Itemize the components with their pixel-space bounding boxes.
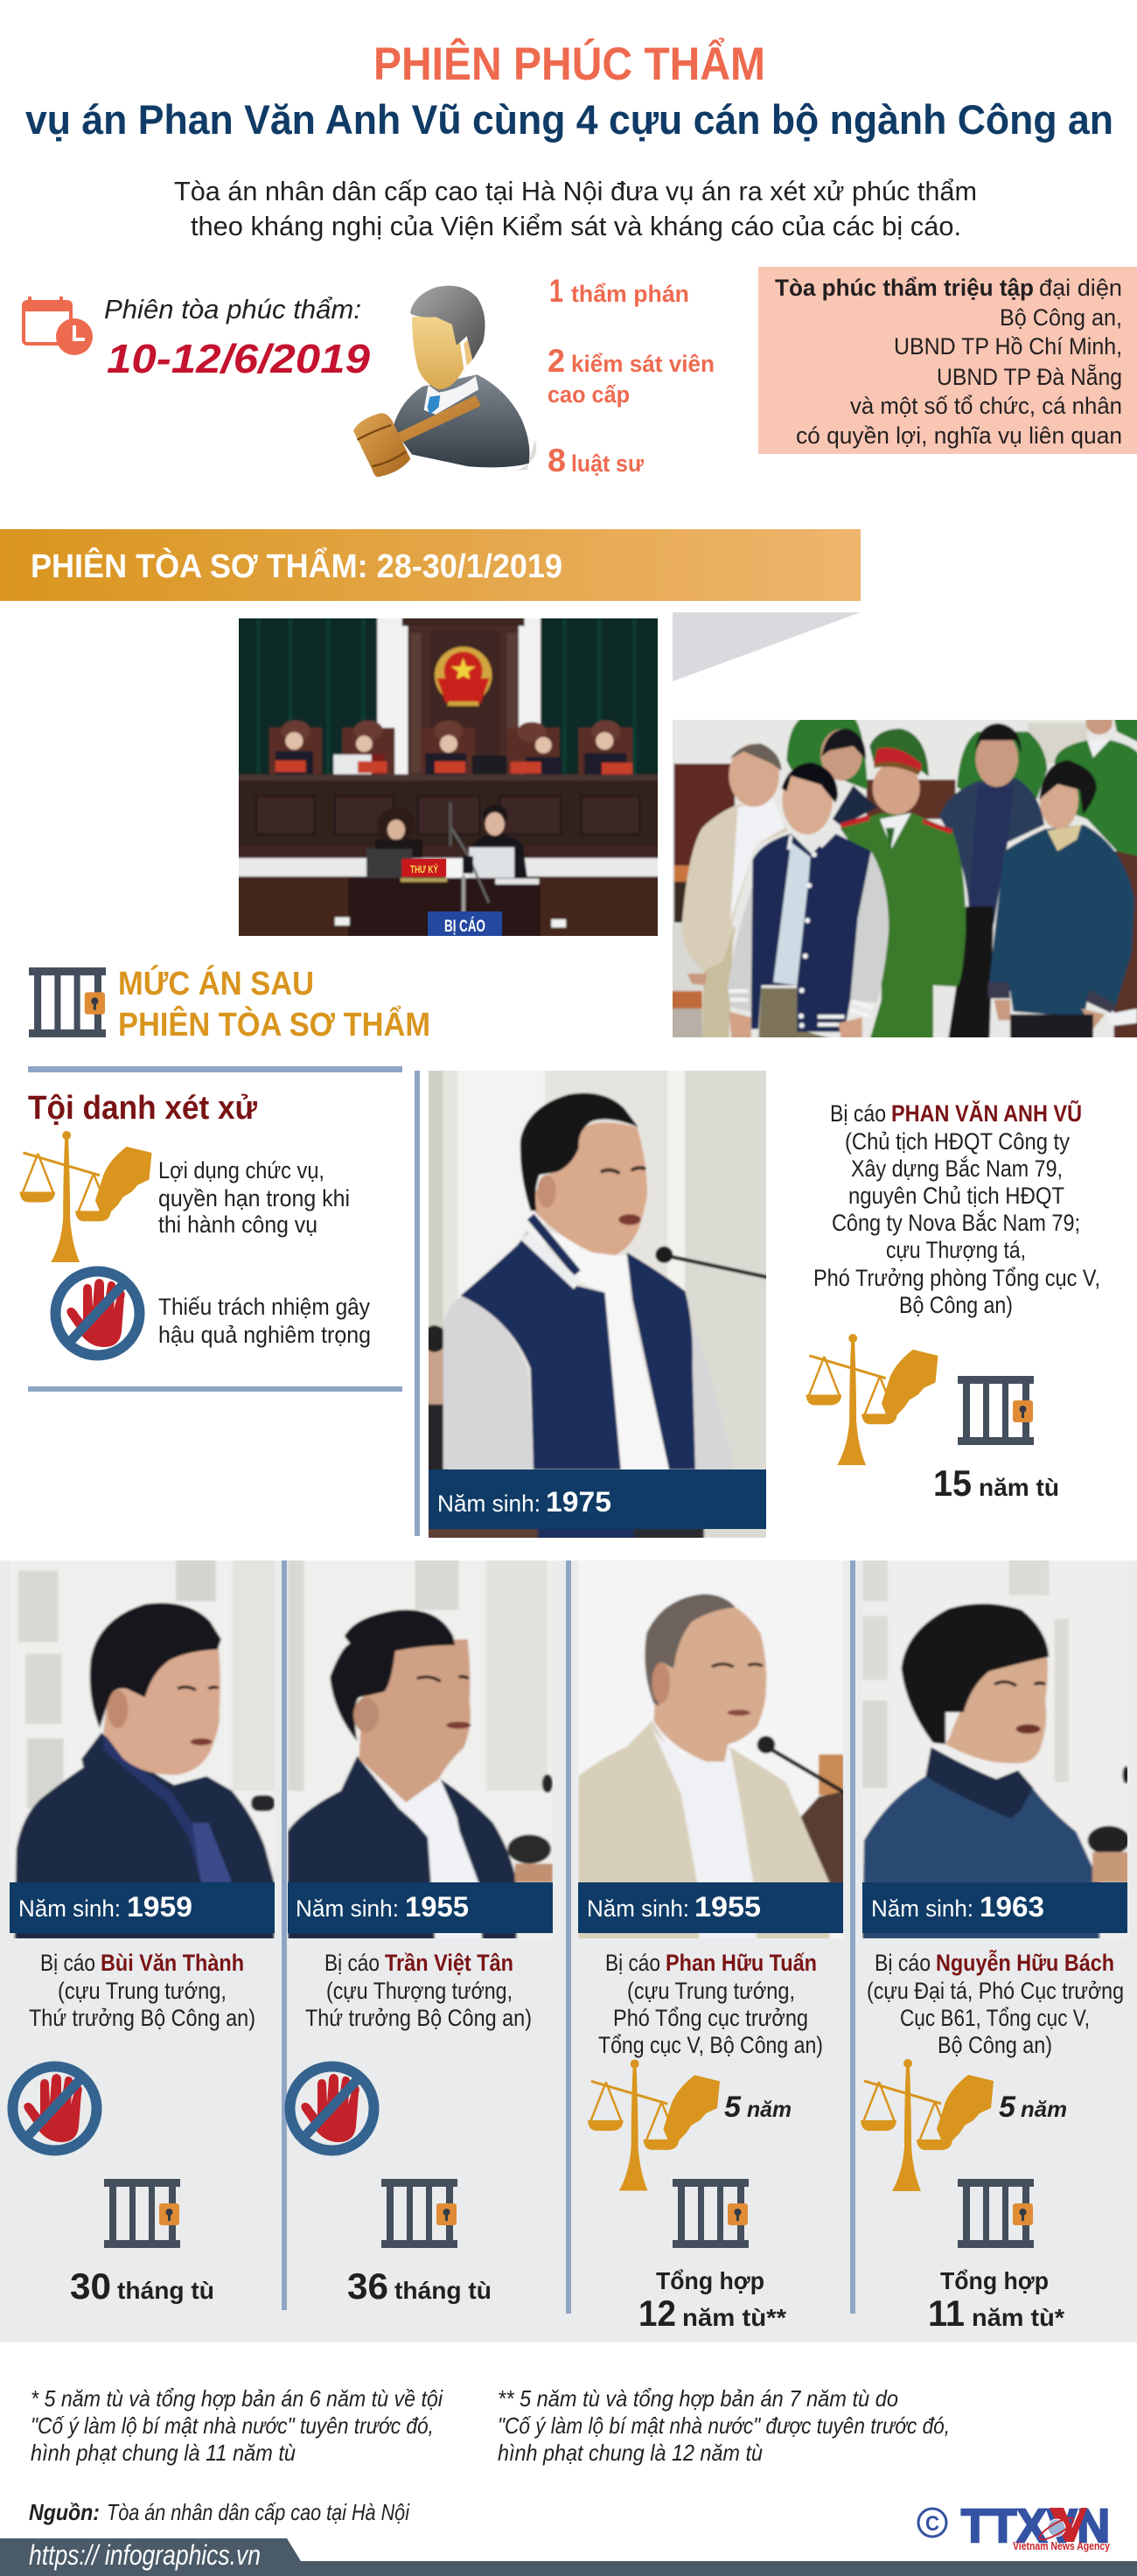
decorative gray triangle pointer xyxy=(673,612,861,681)
bio: Phan Hữu Tuấn: Bị cáo xyxy=(605,1950,660,1976)
stat: prosecutors: cao cấp xyxy=(548,381,630,408)
icon: jail bars xyxy=(381,2179,457,2248)
bio: Nguyễn Hữu Bách: Cục B61, Tổng cục V, xyxy=(900,2005,1090,2031)
photo: Phan Văn Anh Vũ: Năm sinh: xyxy=(437,1490,541,1517)
sentence: 12 years total: năm tù** xyxy=(682,2304,786,2331)
icon: scale and hand xyxy=(588,2059,720,2191)
label: 5 years: 5 xyxy=(999,2091,1016,2124)
intro text xyxy=(174,176,977,241)
panel: summoned parties: có quyền lợi, nghĩa vụ liên quan xyxy=(796,422,1122,449)
source xyxy=(29,2499,410,2525)
sentence: 12 years total: 12 xyxy=(638,2293,676,2334)
heading: sentences after first trial: PHIÊN TÒA SƠ THẨM xyxy=(118,1004,430,1044)
photo: Nguyễn Hữu Bách: Năm sinh: xyxy=(871,1895,973,1922)
hearing date label: Phiên tòa phúc thẩm: xyxy=(104,294,361,325)
icon: stop hand xyxy=(56,1272,140,1356)
bio: Nguyễn Hữu Bách xyxy=(867,1949,1124,2058)
icon: judge with gavel xyxy=(353,286,536,477)
stat: lawyers: luật sư xyxy=(571,450,644,477)
stat: judges: 1 xyxy=(549,273,563,309)
bio: Phan Văn Anh Vũ: Bộ Công an) xyxy=(899,1292,1013,1318)
sentence: 15 years xyxy=(933,1463,1059,1504)
stat: prosecutors xyxy=(548,343,715,408)
footnote: two asterisks xyxy=(498,2385,950,2466)
bio: Phan Hữu Tuấn: Tổng cục V, Bộ Công an) xyxy=(598,2032,823,2058)
stat: prosecutors: kiểm sát viên xyxy=(571,351,715,377)
label: 5 years xyxy=(999,2091,1067,2124)
stat: lawyers: 8 xyxy=(548,443,566,478)
icon: jail bars xyxy=(29,967,106,1037)
sentence: 11 years total xyxy=(928,2267,1064,2334)
bio: Phan Văn Anh Vũ: (Chủ tịch HĐQT Công ty xyxy=(845,1128,1070,1155)
photo: Bùi Văn Thành: 1959 xyxy=(127,1891,192,1923)
bio: Phan Văn Anh Vũ xyxy=(813,1100,1100,1318)
bio: Trần Việt Tân: Bị cáo xyxy=(324,1950,380,1976)
icon: jail bars xyxy=(673,2179,749,2248)
sentence: 30 months: 30 xyxy=(70,2265,111,2307)
photo: Nguyễn Hữu Bách: 1963 xyxy=(980,1891,1044,1923)
stat: prosecutors: 2 xyxy=(548,343,565,379)
photo: courtroom: BỊ CÁO xyxy=(444,917,485,936)
sentence: 11 years total: 11 xyxy=(928,2293,965,2334)
stat: lawyers xyxy=(548,443,644,478)
photo: defendants standing in court xyxy=(670,711,1137,1041)
icon: scale and hand xyxy=(861,2059,994,2191)
sentence: 11 years total: Tổng hợp xyxy=(940,2267,1049,2294)
bio: Bùi Văn Thành: Bùi Văn Thành xyxy=(101,1950,244,1976)
sentence: 30 months: tháng tù xyxy=(117,2277,214,2304)
charge: abuse of power xyxy=(158,1157,350,1238)
stat: judges: thẩm phán xyxy=(571,281,689,307)
bio: Nguyễn Hữu Bách: Bị cáo xyxy=(875,1950,931,1976)
photo: Phan Hữu Tuấn: 1955 xyxy=(694,1891,761,1923)
photo: courtroom: THƯ KÝ xyxy=(410,862,438,876)
icon: scale and hand xyxy=(20,1131,151,1262)
photo: Phan Văn Anh Vũ: 1975 xyxy=(546,1486,611,1518)
panel: summoned parties: đại diện xyxy=(1039,275,1122,301)
icon: scale and hand xyxy=(806,1334,938,1465)
sentence: 36 months: 36 xyxy=(347,2265,388,2307)
panel: summoned parties: UBND TP Đà Nẵng xyxy=(937,363,1122,390)
stat: judges xyxy=(549,273,689,309)
banner: first-instance trial xyxy=(0,529,861,601)
footnote: one asterisk: * 5 năm tù và tổng hợp bản án 6 năm tù về tội xyxy=(31,2385,443,2412)
heading: sentences after first trial: MỨC ÁN SAU xyxy=(118,964,314,1002)
label: 5 years xyxy=(724,2091,792,2124)
charge: abuse of power: quyền hạn trong khi xyxy=(158,1185,350,1211)
logo: TTXVN: Vietnam News Agency xyxy=(1013,2539,1111,2552)
bio: Bùi Văn Thành xyxy=(29,1950,255,2031)
bio: Trần Việt Tân: Trần Việt Tân xyxy=(385,1950,513,1976)
photo: Phan Hữu Tuấn xyxy=(575,1558,846,1943)
logo: TTXVN: TTXVN xyxy=(961,2500,1110,2552)
bio: Trần Việt Tân xyxy=(305,1950,532,2031)
panel: summoned parties: Tòa phúc thẩm triệu tập xyxy=(775,275,1034,301)
bio: Phan Văn Anh Vũ: nguyên Chủ tịch HĐQT xyxy=(848,1183,1064,1209)
bio: Bùi Văn Thành: Bị cáo xyxy=(40,1950,95,1976)
icon: jail bars xyxy=(958,1376,1034,1445)
photo: Nguyễn Hữu Bách xyxy=(859,1558,1131,1943)
charge: negligence: Thiếu trách nhiệm gây xyxy=(158,1294,370,1320)
bio: Phan Hữu Tuấn: Phan Hữu Tuấn xyxy=(666,1950,817,1976)
bio: Trần Việt Tân: (cựu Thượng tướng, xyxy=(326,1978,513,2004)
hearing date: 10-12/6/2019 xyxy=(107,336,370,381)
bio: Phan Văn Anh Vũ: Phó Trưởng phòng Tổng cục V, xyxy=(813,1265,1100,1291)
sentence: 15 years: năm tù xyxy=(979,1474,1059,1501)
photo: Phan Văn Anh Vũ xyxy=(422,1068,770,1541)
intro text: theo kháng nghị của Viện Kiểm sát và kháng cáo của các bị cáo. xyxy=(191,211,961,241)
logo: TTXVN: C xyxy=(925,2512,939,2536)
panel: charges xyxy=(20,1090,371,1356)
photo: Bùi Văn Thành: Năm sinh: xyxy=(18,1895,121,1922)
sentence: 12 years total: Tổng hợp xyxy=(656,2267,764,2294)
photo: Trần Việt Tân: Năm sinh: xyxy=(296,1895,399,1922)
bio: Phan Hữu Tuấn: (cựu Trung tướng, xyxy=(627,1978,795,2004)
bio: Phan Văn Anh Vũ: Xây dựng Bắc Nam 79, xyxy=(851,1155,1063,1182)
panel: four other defendants xyxy=(0,1558,1137,2342)
title: phiên phúc thẩm: PHIÊN PHÚC THẨM xyxy=(373,37,765,90)
photo: Trần Việt Tân xyxy=(284,1558,556,1943)
sentence: 15 years: 15 xyxy=(933,1463,972,1504)
panel: summoned parties: Bộ Công an, xyxy=(1000,304,1122,331)
panel: summoned parties xyxy=(758,267,1137,454)
panel: summoned parties: và một số tổ chức, cá nhân xyxy=(850,393,1122,419)
source: Tòa án nhân dân cấp cao tại Hà Nội xyxy=(107,2499,410,2525)
label: 5 years: 5 xyxy=(724,2091,742,2124)
footnote: two asterisks: hình phạt chung là 12 năm tù xyxy=(498,2440,763,2466)
sentence: 12 years total xyxy=(638,2267,786,2334)
bio: Nguyễn Hữu Bách: Bộ Công an) xyxy=(938,2032,1052,2058)
icon: jail bars xyxy=(958,2179,1034,2248)
bio: Phan Văn Anh Vũ: Công ty Nova Bắc Nam 79; xyxy=(832,1209,1080,1236)
sentence: 36 months: tháng tù xyxy=(394,2277,492,2304)
footnote: one asterisk: hình phạt chung là 11 năm tù xyxy=(31,2440,296,2466)
icon: calendar with clock xyxy=(24,297,93,355)
footnote: two asterisks: ** 5 năm tù và tổng hợp bản án 7 năm tù do xyxy=(498,2385,898,2412)
icon: jail bars xyxy=(104,2179,180,2248)
source: Nguồn: xyxy=(29,2499,100,2525)
footnote: two asterisks: "Cố ý làm lộ bí mật nhà nước" được tuyên trước đó, xyxy=(498,2412,950,2439)
label: 5 years: năm xyxy=(1021,2098,1067,2122)
heading: sentences after first trial xyxy=(118,964,430,1044)
sentence: 36 months xyxy=(347,2265,492,2307)
photo: Bùi Văn Thành xyxy=(7,1558,277,1943)
photo: Phan Hữu Tuấn: Năm sinh: xyxy=(587,1895,689,1922)
icon: stop hand xyxy=(290,2066,374,2150)
banner: first-instance trial: PHIÊN TÒA SƠ THẨM: 28-30/1/2019 xyxy=(31,546,562,585)
panel: summoned parties: UBND TP Hồ Chí Minh, xyxy=(894,333,1122,360)
charge: abuse of power: thi hành công vụ xyxy=(158,1211,317,1238)
bio: Phan Văn Anh Vũ: PHAN VĂN ANH VŨ xyxy=(891,1100,1082,1127)
footer bar with url xyxy=(0,2538,1137,2576)
footer bar with url: https:// infographics.vn xyxy=(29,2539,261,2571)
bio: Phan Văn Anh Vũ: cựu Thượng tá, xyxy=(886,1237,1026,1263)
charge: negligence: hậu quả nghiêm trọng xyxy=(158,1322,371,1348)
intro text: Tòa án nhân dân cấp cao tại Hà Nội đưa vụ án ra xét xử phúc thẩm xyxy=(174,176,977,206)
label: 5 years: năm xyxy=(747,2098,792,2122)
footnote: one asterisk xyxy=(31,2385,443,2466)
sentence: 30 months xyxy=(70,2265,214,2307)
photo: courtroom xyxy=(236,616,661,939)
bio: Phan Hữu Tuấn: Phó Tổng cục trưởng xyxy=(613,2005,808,2031)
bio: Trần Việt Tân: Thứ trưởng Bộ Công an) xyxy=(305,2005,532,2031)
charge: abuse of power: Lợi dụng chức vụ, xyxy=(158,1157,324,1183)
icon: stop hand xyxy=(12,2066,96,2150)
bio: Nguyễn Hữu Bách: Nguyễn Hữu Bách xyxy=(936,1949,1114,1976)
bio: Bùi Văn Thành: (cựu Trung tướng, xyxy=(58,1978,227,2004)
bio: Bùi Văn Thành: Thứ trưởng Bộ Công an) xyxy=(29,2005,255,2031)
photo: Trần Việt Tân: 1955 xyxy=(405,1891,469,1923)
footnote: one asterisk: "Cố ý làm lộ bí mật nhà nước" tuyên trước đó, xyxy=(31,2412,434,2439)
bio: Phan Văn Anh Vũ: Bị cáo xyxy=(830,1100,886,1127)
charge: negligence xyxy=(158,1294,371,1348)
heading: charges: Tội danh xét xử xyxy=(28,1090,257,1127)
sentence: 11 years total: năm tù* xyxy=(972,2304,1064,2331)
bio: Phan Hữu Tuấn xyxy=(598,1950,823,2058)
